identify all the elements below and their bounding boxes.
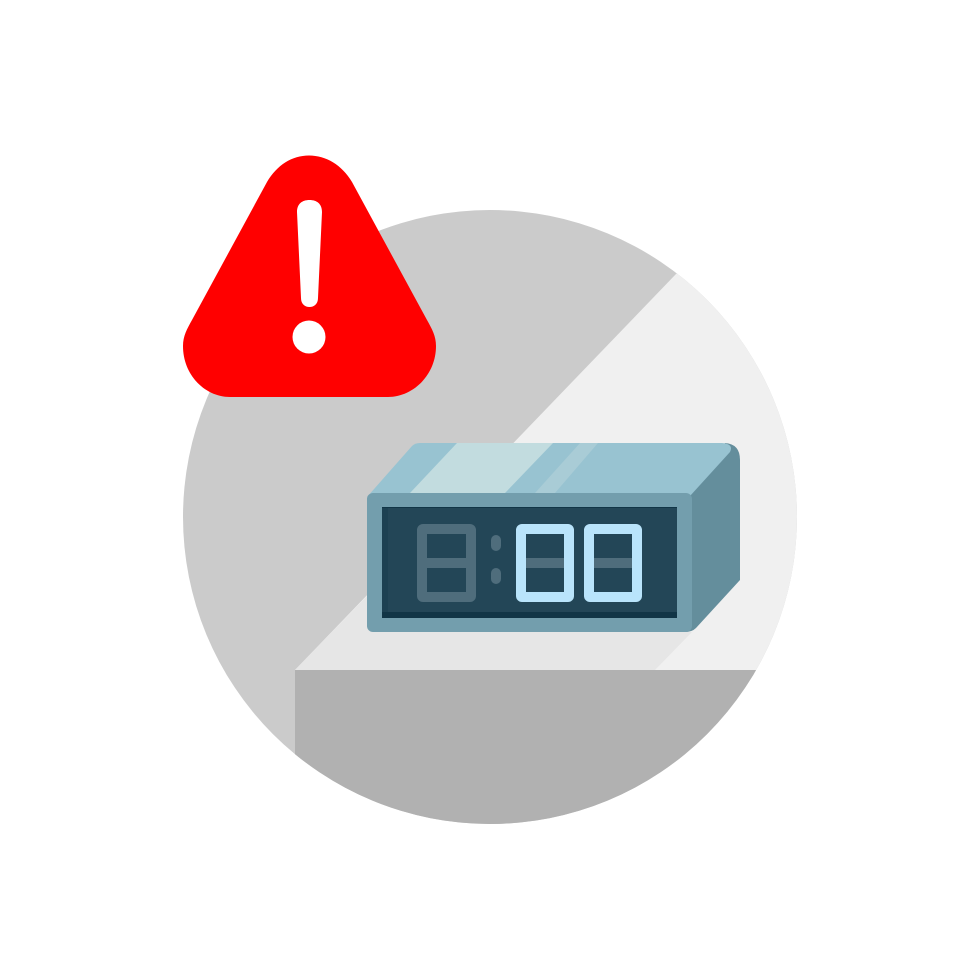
triangle body [183, 156, 436, 397]
warning triangle [183, 156, 436, 397]
shelf front [295, 670, 756, 824]
digit: zero [521, 529, 569, 597]
light wall diagonal [295, 274, 797, 670]
clock front face [367, 493, 692, 632]
top reflection wide [410, 443, 553, 493]
background circle scene [180, 205, 810, 830]
top reflection narrow [535, 443, 598, 493]
display screen [382, 507, 677, 618]
colon [491, 535, 501, 584]
digit: dim eight [422, 529, 471, 597]
shelf top shadow [295, 596, 692, 670]
exclamation bar [297, 200, 322, 307]
exclamation dot [292, 320, 326, 354]
clock top face [367, 443, 731, 497]
dark wall [180, 205, 800, 830]
clock side face [685, 443, 740, 632]
digit: zero [589, 529, 637, 597]
alarm clock [367, 443, 740, 632]
